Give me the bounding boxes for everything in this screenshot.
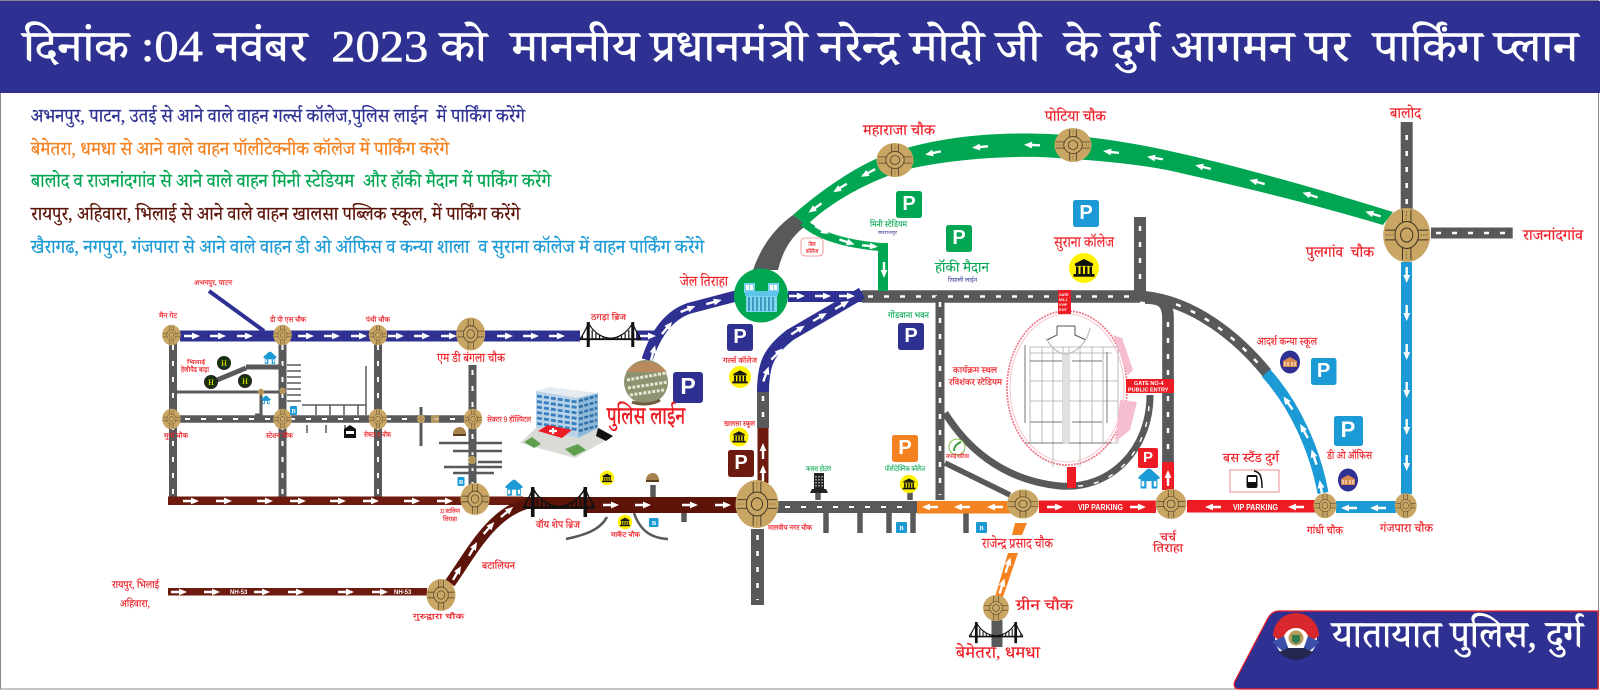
map labels: red place names — [111, 105, 1585, 662]
parking sign: police line — [673, 372, 703, 403]
label: Garden: सफाई वाटिका — [945, 452, 970, 460]
parking sign: Khalsa school: P — [734, 452, 748, 474]
label: Maharaja chowk: महाराजा चौक — [862, 122, 936, 139]
gate 4 sign: GATE NO-4 — [1134, 381, 1164, 387]
label: Green chowk: ग्रीन चौक — [1015, 597, 1075, 614]
label: Battalion tiraha: 32 बटालियन — [440, 507, 461, 515]
label: MD Bangla chowk: एम डी बंगला चौक — [436, 350, 506, 365]
icons: blue B markers — [290, 406, 987, 533]
label: Rajnandgaon: राजनांदगांव — [1522, 227, 1585, 244]
parking sign: DO office: P — [1341, 417, 1355, 442]
route: red VIP parking road: VIP PARKING — [1233, 502, 1278, 512]
stadium venue plan — [1007, 311, 1137, 467]
icon: police line building — [520, 387, 613, 458]
route: green Balod road — [793, 133, 1393, 291]
gate 1 sign — [1058, 290, 1071, 314]
gate bottom sign — [1067, 467, 1076, 488]
label: Abhanpur Patan: अभनपुर, पाटन — [194, 278, 233, 288]
parking sign: VIP — [1138, 448, 1158, 468]
legend line: Balod route: बालोद व राजनांदगांव से आने वाले वाहन मिनी स्टेडियम और हॉकी मैदान में पार्किंग करेंगे — [30, 169, 552, 192]
label: Murga chowk: मुर्गा चौक — [163, 431, 189, 441]
label: Battalion: बटालियन — [481, 560, 516, 572]
label: Main gate: मैन गेट — [158, 311, 178, 320]
icons: food domes and hotel — [344, 415, 828, 493]
label: Surana college: सुराना कॉलेज — [1053, 233, 1115, 251]
label: Church tiraha: चर्च — [1159, 530, 1177, 544]
label: Balod: बालोद — [1389, 105, 1422, 122]
legend line: Abhanpur route: अभनपुर, पाटन, उतई से आने वाले वाहन गर्ल्स कॉलेज,पुलिस लाईन में पार्किंग करेंगे — [31, 104, 526, 128]
label: Helipad: हेलीपैड बाड़ा — [180, 366, 209, 374]
label: Helipad: भिलाई — [186, 358, 206, 366]
route: maroon Raipur road: NH-53 — [230, 590, 248, 596]
label: Baghrajpur: बघराजपुर — [877, 231, 898, 236]
label: Pulgaon chowk: पुलगांव चौक — [1305, 244, 1375, 261]
label: Church tiraha — [1152, 530, 1184, 555]
icons: blue B markers: B — [979, 525, 984, 532]
gate 1 sign: NO-1 — [1059, 298, 1067, 302]
label: Ahiwara: अहिवारा, — [120, 598, 150, 610]
icon: Bemetara bridge — [969, 622, 1023, 643]
logo: traffic police emblem — [1272, 613, 1320, 660]
label: Malviya nagar chowk: मालवीय नगर चौक — [767, 524, 813, 532]
legend line: Raipur route: रायपुर, अहिवारा, भिलाई से आने वाले वाहन खालसा पब्लिक स्कूल, में पार्किंग करेंगे — [30, 202, 521, 226]
label: Battalion tiraha: तिराहा — [442, 515, 458, 523]
gate 4 sign — [1126, 379, 1174, 394]
label: Kalash hotel: कलश होटल — [805, 465, 831, 473]
parking sign: girls college: P — [733, 326, 747, 348]
gate 1 sign: EXIT — [1059, 308, 1068, 312]
icon: Thagda bridge — [580, 322, 641, 347]
map labels: green and navy place names — [805, 218, 990, 473]
label: Ganjpara chowk: गंजपारा चौक — [1379, 520, 1434, 535]
label: Adarsh girls school: आदर्श कन्या स्कूल — [1257, 335, 1318, 349]
label: Panthi chowk: पंथी चौक — [365, 315, 391, 324]
legend: parking instructions — [30, 104, 705, 259]
label: Jail tiraha: जेल तिराहा — [679, 272, 729, 290]
label: Police line: पुलिस लाईन — [606, 401, 686, 432]
route: navy Abhanpur road — [180, 291, 862, 392]
label: Station chowk: स्टेशन चौक — [265, 431, 294, 440]
parking sign: Gondwana bhavan — [898, 323, 924, 350]
parking sign: Surana college: P — [1079, 202, 1093, 224]
label: Khalsa school: खालसा स्कूल — [723, 420, 755, 429]
label: Bemetara Dhamdha: बेमेतरा, धमधा — [955, 642, 1041, 662]
parking sign: Gondwana bhavan: P — [904, 325, 918, 347]
label: Y shape bridge: वॉय शेप ब्रिज — [535, 519, 581, 531]
label: DO office: डी ओ ऑफिस — [1326, 449, 1373, 462]
label: Sector 6 chowk: सेक्टर 6 चौक — [363, 430, 392, 439]
parking sign: DO office — [1334, 416, 1363, 446]
route: red VIP parking road — [1039, 462, 1315, 513]
title banner — [0, 1, 1600, 93]
parking sign: polytechnic: P — [898, 437, 912, 459]
label: Church tiraha: तिराहा — [1152, 540, 1184, 555]
route: maroon Raipur road — [168, 428, 768, 596]
label: Hockey ground: हॉकी मैदान — [934, 258, 990, 276]
icon: jail circle — [734, 268, 788, 322]
icons: blue B markers: B — [291, 408, 296, 415]
parking sign: polytechnic — [892, 435, 918, 462]
label: Gondwana bhavan: गोंडवाना भवन — [887, 310, 929, 320]
label: Helipad — [180, 358, 209, 374]
label: Battalion tiraha — [440, 507, 461, 523]
route: sky blue Khairagarh road — [1266, 262, 1412, 513]
parking sign: Surana college — [1073, 200, 1099, 227]
gate 1 sign: VVIP — [1059, 303, 1068, 307]
parking sign: Khalsa school — [728, 450, 754, 477]
icon: bus stand — [1230, 470, 1279, 492]
label: Gurudwara chowk: गुरुद्वारा चौक — [411, 612, 466, 622]
icons: helipads: H — [208, 378, 214, 387]
parking sign: hockey ground: P — [952, 227, 966, 249]
icons: helipads: H — [242, 377, 248, 386]
label: Risali line: रिसाली लाईन — [947, 276, 978, 284]
label: Sector 9 hospital: सेक्टर 9 हॉस्पिटल — [486, 414, 532, 424]
parking sign: hockey ground — [946, 225, 972, 252]
icons: blue B markers: B — [459, 479, 464, 486]
roundabouts — [162, 128, 1430, 621]
icons: helipads — [204, 356, 252, 388]
parking sign: Adarsh school: P — [1317, 360, 1330, 382]
route: maroon Raipur road: NH-53 — [394, 590, 412, 596]
label: Raipur Bhilai: रायपुर, भिलाई — [111, 579, 160, 591]
label: Potiya chowk: पोटिया चौक — [1044, 108, 1107, 125]
icon: plant garden — [949, 439, 965, 455]
legend line: Bemetara route: बेमेतरा, धमधा से आने वाले वाहन पॉलीटेक्नीक कॉलेज में पार्किंग करेंगे — [30, 137, 450, 160]
photo circle: police line — [624, 360, 668, 404]
road network: grey roads — [171, 122, 1513, 647]
title: दिनांक :04 नवंबर 2023 को माननीय प्रधानमंत्री नरेन्द्र मोदी जी के दुर्ग आगमन पर पार्किंग प्लान — [21, 20, 1581, 73]
parking sign: police line: P — [680, 373, 696, 399]
icons: blue B markers: B — [652, 520, 657, 527]
icons: blue B markers: B — [899, 525, 904, 532]
label: Event venue: कार्यक्रम स्थल — [952, 365, 998, 375]
parking sign: VIP: P — [1143, 449, 1153, 466]
icons: helipads: H — [221, 359, 227, 368]
icons: school markers — [1280, 350, 1358, 492]
label: Market chowk: मार्केट चौक — [610, 530, 641, 539]
footer banner: traffic police — [1234, 611, 1598, 689]
icon: red outline sign — [801, 238, 823, 256]
icon: Y shape bridge — [523, 487, 595, 517]
route: red VIP parking road: VIP PARKING — [1078, 502, 1123, 512]
gate 1 sign: GATE — [1059, 293, 1069, 297]
footer text: यातायात पुलिस, दुर्ग — [1330, 613, 1585, 658]
gate 4 sign: PUBLIC ENTRY — [1128, 388, 1169, 394]
label: Bus stand: बस स्टैंड दुर्ग — [1222, 450, 1280, 466]
icon: red outline sign: कॉलेज — [805, 247, 819, 255]
legend line: Khairagarh route: खैरागढ, नगपुरा, गंजपारा से आने वाले वाहन डी ओ ऑफिस व कन्या शाला व सुराना कॉलेज में वाहन पार्किंग करेंगे — [30, 235, 705, 259]
route: orange Bemetara road — [917, 501, 1027, 597]
label: Gandhi chowk: गांधी चौक — [1306, 524, 1344, 537]
icons: blue houses — [262, 352, 1160, 496]
label: Mini stadium: मिनी स्टेडियम — [869, 218, 908, 229]
parking sign: girls college — [727, 324, 753, 351]
label: Polytechnic college: पॉलीटेक्निक कॉलेज — [884, 465, 925, 473]
parking sign: mini stadium: P — [902, 193, 916, 215]
label: Thagda bridge: ठगड़ा ब्रिज — [590, 311, 627, 322]
label: DPS chowk: डी पी एस चौक — [269, 315, 307, 324]
parking sign: Adarsh school — [1311, 358, 1336, 385]
icons: yellow college markers — [600, 253, 1099, 529]
parking sign: mini stadium — [896, 191, 922, 218]
label: Girls college: गर्ल्स कॉलेज — [722, 355, 758, 365]
icon: red outline sign: जेल — [807, 240, 816, 248]
label: Ravishankar stadium: रविशंकर स्टेडियम — [948, 376, 1003, 387]
label: Rajendra Prasad chowk: राजेन्द्र प्रसाद चौक — [981, 534, 1054, 552]
